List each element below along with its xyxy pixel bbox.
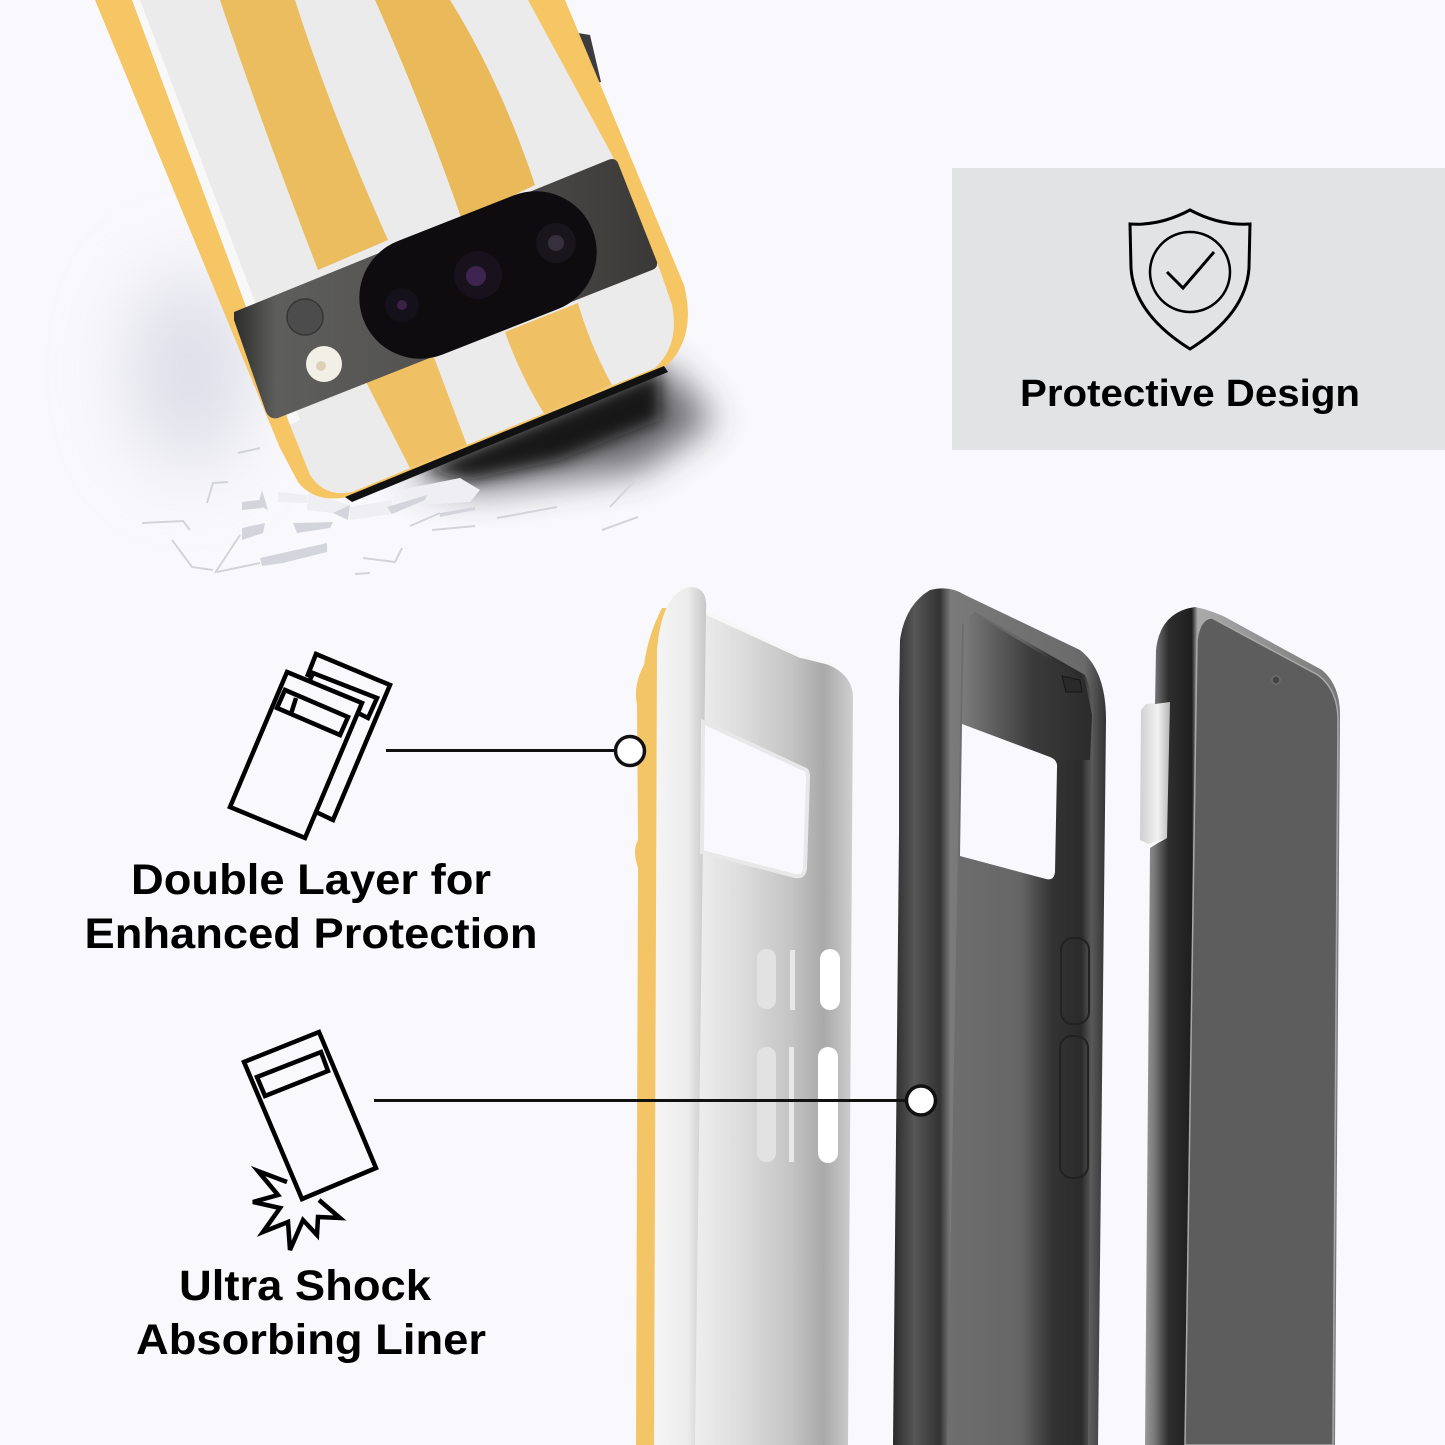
- interior: [947, 612, 1093, 1445]
- phone body: [1145, 607, 1340, 1445]
- yellow edge: [635, 608, 672, 1445]
- heading: protective design: Protective Design: [1020, 373, 1360, 415]
- case back white: [132, 0, 674, 493]
- phone side and screen: [1140, 607, 1340, 1445]
- case outer shell: [95, 0, 688, 499]
- side button: [572, 32, 601, 84]
- camera cutout: [702, 722, 808, 876]
- connector line: shock liner: [374, 1086, 936, 1115]
- shell: yellow and white outer case: [635, 587, 853, 1445]
- connector line: double layer: [386, 736, 644, 766]
- heading: double layer: Double Layer for: [131, 856, 491, 904]
- side buttons: [1060, 938, 1089, 1178]
- lens left: [385, 288, 419, 322]
- cracked ground debris: [142, 448, 638, 574]
- heading: double layer: Enhanced Protection: [84, 910, 538, 958]
- flash: [306, 346, 342, 382]
- screen: [1185, 618, 1338, 1445]
- heading: shock liner: Absorbing Liner: [136, 1316, 486, 1364]
- upper rim: [706, 612, 832, 664]
- drop shadow under phone: [130, 270, 715, 490]
- heading: shock liner: Ultra Shock: [179, 1262, 431, 1310]
- heading: double layer: [84, 856, 538, 958]
- outer body: [893, 588, 1106, 1445]
- camera pill: [341, 173, 615, 377]
- white side wall: [654, 587, 706, 1445]
- camera cutout: [960, 724, 1057, 879]
- icon: shield with check: [1130, 210, 1250, 349]
- interior: [690, 612, 853, 1445]
- phone in tough case, yellow stripes: [95, 0, 688, 502]
- silver tab: [1140, 702, 1170, 844]
- shell: dark shock-absorbing liner: [893, 588, 1106, 1445]
- icon: double layer cases: [230, 654, 390, 838]
- bottom black edge: [345, 366, 668, 502]
- heading: shock liner: [136, 1262, 486, 1364]
- lens right: [536, 223, 576, 263]
- stripes: [132, 0, 612, 472]
- panel: protective design: [952, 168, 1445, 450]
- front camera: [1272, 676, 1280, 684]
- sensor: [287, 299, 323, 335]
- notch: [1062, 676, 1082, 692]
- lens center: [454, 251, 502, 299]
- camera bar: [234, 159, 657, 418]
- icon: phone impact: [244, 1032, 376, 1250]
- inner dark upper band: [962, 614, 1092, 760]
- vents: [757, 949, 840, 1163]
